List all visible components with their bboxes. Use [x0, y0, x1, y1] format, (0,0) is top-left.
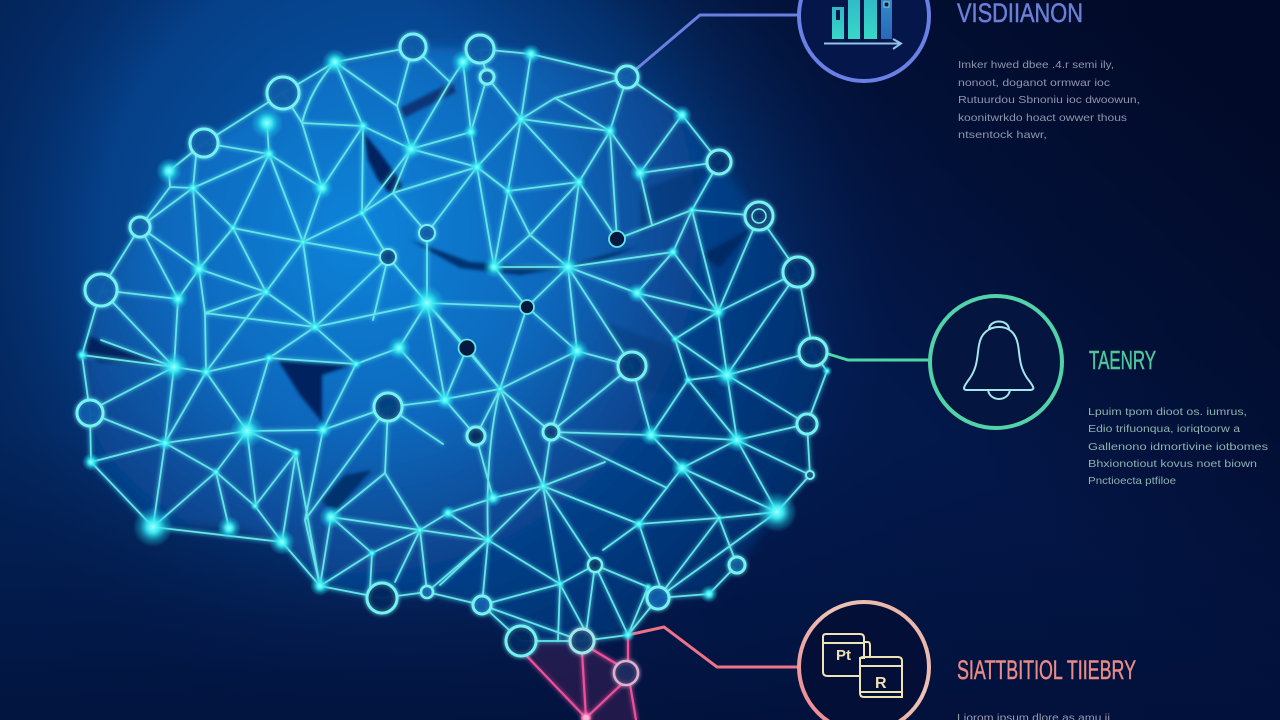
dark ring nodes — [458, 231, 625, 356]
icon: two documents — [823, 634, 902, 697]
icon circle: theory — [930, 296, 1062, 428]
ring nodes — [77, 34, 827, 720]
connector line: theory — [825, 353, 930, 360]
connector line: statistical theory — [628, 627, 800, 667]
icon: two documents: R — [875, 675, 887, 692]
icon: bar chart — [824, 0, 901, 49]
neural network links — [82, 47, 827, 641]
text block: visualization: Rutuurdou Sbnoniu ioc dwoowun, — [958, 94, 1140, 106]
text block: visualization: koonitwrkdo hoact owwer thous — [958, 112, 1127, 124]
icon circle: visualization — [799, 0, 929, 81]
connector line: visualization — [627, 15, 800, 77]
callout: theory — [930, 296, 1268, 487]
heading: theory: TAENRY — [1089, 345, 1156, 375]
callout: statistical theory — [799, 602, 1136, 720]
text block: theory: Gallenono idmortivine iotbomes — [1088, 441, 1268, 453]
text block: theory: Edio trifuonqua, ioriqtoorw a — [1088, 423, 1240, 435]
icon circle: statistical theory — [799, 602, 929, 720]
glowing nodes — [75, 44, 832, 642]
icon: bell — [964, 322, 1033, 399]
heading: statistical theory: SIATTBITIOL TIIEBRY — [957, 655, 1136, 685]
text block: theory: Bhxionotiout kovus noet biown — [1088, 458, 1257, 470]
text block: visualization: ntsentock hawr, — [958, 129, 1047, 141]
text block: visualization: nonoot, doganot ormwar ioc — [958, 77, 1110, 89]
dark folds inside the brain — [86, 82, 752, 512]
brain silhouette — [82, 47, 827, 641]
icon: two documents: Pt — [836, 647, 851, 664]
text block: theory — [1088, 406, 1268, 487]
text block: visualization — [958, 59, 1140, 141]
text block: theory: Pnctioecta ptfiloe — [1088, 475, 1176, 487]
text block: visualization: Imker hwed dbee .4.r semi ily, — [958, 59, 1114, 71]
pink lower network — [521, 635, 640, 720]
text block: theory: Lpuim tpom dioot os. iumrus, — [1088, 406, 1247, 418]
callout: visualization — [799, 0, 1140, 141]
